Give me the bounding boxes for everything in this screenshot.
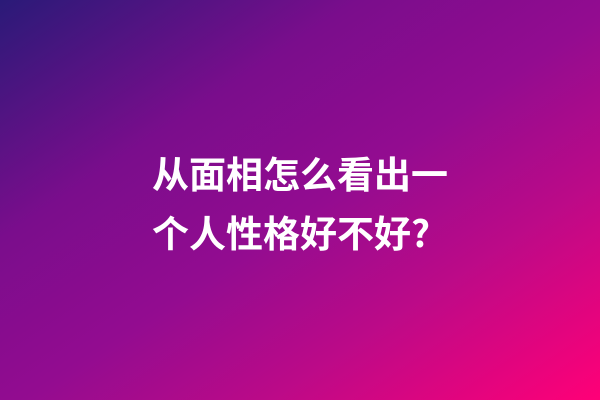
title (152, 145, 448, 258)
title: 从面相怎么看出一 (152, 145, 448, 199)
title: 个人性格好不好? (152, 204, 430, 258)
